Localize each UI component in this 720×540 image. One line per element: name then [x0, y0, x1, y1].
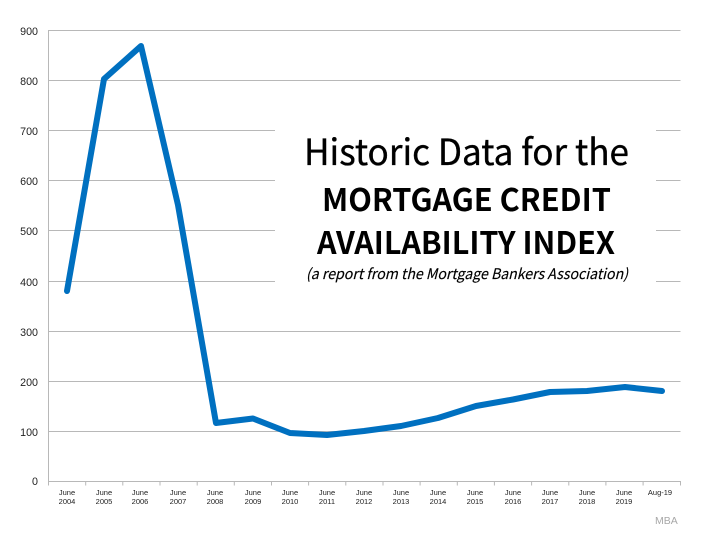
- x axis labels: 2010: [282, 497, 298, 506]
- x axis labels: June: [616, 488, 632, 497]
- y axis labels: 200: [20, 377, 38, 389]
- x axis labels: June: [132, 488, 148, 497]
- x axis labels: 2004: [59, 497, 75, 506]
- x axis labels: [59, 488, 672, 506]
- title: (a report from the Mortgage Bankers Association): [306, 263, 629, 284]
- title: AVAILABILITY INDEX: [316, 218, 615, 263]
- x axis labels: 2019: [616, 497, 632, 506]
- x axis labels: 2007: [170, 497, 186, 506]
- x axis labels: June: [319, 488, 335, 497]
- x axis labels: June: [170, 488, 186, 497]
- x axis labels: June: [430, 488, 446, 497]
- x axis labels: June: [356, 488, 372, 497]
- x axis labels: 2005: [96, 497, 112, 506]
- y axis labels: 500: [20, 226, 38, 238]
- x axis labels: 2017: [542, 497, 558, 506]
- x axis labels: June: [282, 488, 298, 497]
- y axis labels: 600: [20, 176, 38, 188]
- x axis labels: Aug-19: [648, 488, 672, 497]
- title backing panel: [275, 122, 656, 290]
- y axis labels: 300: [20, 327, 38, 339]
- y axis labels: 800: [20, 76, 38, 88]
- x axis labels: 2006: [132, 497, 148, 506]
- y axis labels: 100: [20, 427, 38, 439]
- x axis labels: June: [245, 488, 261, 497]
- x axis labels: 2016: [505, 497, 521, 506]
- x axis labels: 2008: [207, 497, 223, 506]
- x axis labels: 2015: [467, 497, 483, 506]
- y axis labels: 900: [20, 26, 38, 38]
- y axis labels: [20, 26, 38, 488]
- x axis labels: June: [96, 488, 112, 497]
- title: [304, 124, 629, 284]
- title: Historic Data for the: [304, 124, 629, 176]
- axes: [48, 30, 680, 486]
- data line: mortgage credit availability index: [67, 46, 662, 435]
- x axis labels: 2011: [319, 497, 335, 506]
- y axis labels: 700: [20, 126, 38, 138]
- x axis labels: June: [467, 488, 483, 497]
- x axis labels: June: [542, 488, 558, 497]
- x axis labels: June: [579, 488, 595, 497]
- x axis labels: June: [393, 488, 409, 497]
- source label: MBA: [655, 515, 678, 527]
- x axis labels: 2014: [430, 497, 446, 506]
- x axis labels: June: [59, 488, 75, 497]
- x axis labels: June: [207, 488, 223, 497]
- x axis labels: 2012: [356, 497, 372, 506]
- x axis labels: 2013: [393, 497, 409, 506]
- y axis labels: 400: [20, 277, 38, 289]
- y axis labels: 0: [32, 476, 38, 488]
- x axis labels: 2009: [245, 497, 261, 506]
- x axis labels: June: [505, 488, 521, 497]
- x axis labels: 2018: [579, 497, 595, 506]
- title: MORTGAGE CREDIT: [322, 175, 611, 220]
